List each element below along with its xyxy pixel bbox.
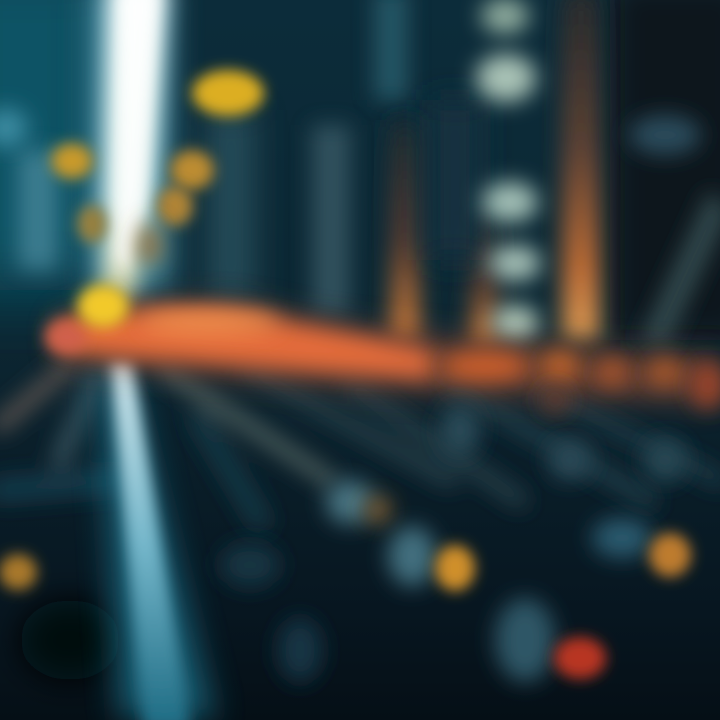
vertical building columns [0,0,720,350]
floor lights [0,404,691,682]
bright yellow flare [77,284,129,328]
upper light beam [92,0,170,300]
pale window lights [476,0,541,341]
yellow lights [51,70,264,267]
lower light beam [100,360,215,720]
perspective rays on floor [0,365,720,520]
orange horizontal band [46,305,720,414]
